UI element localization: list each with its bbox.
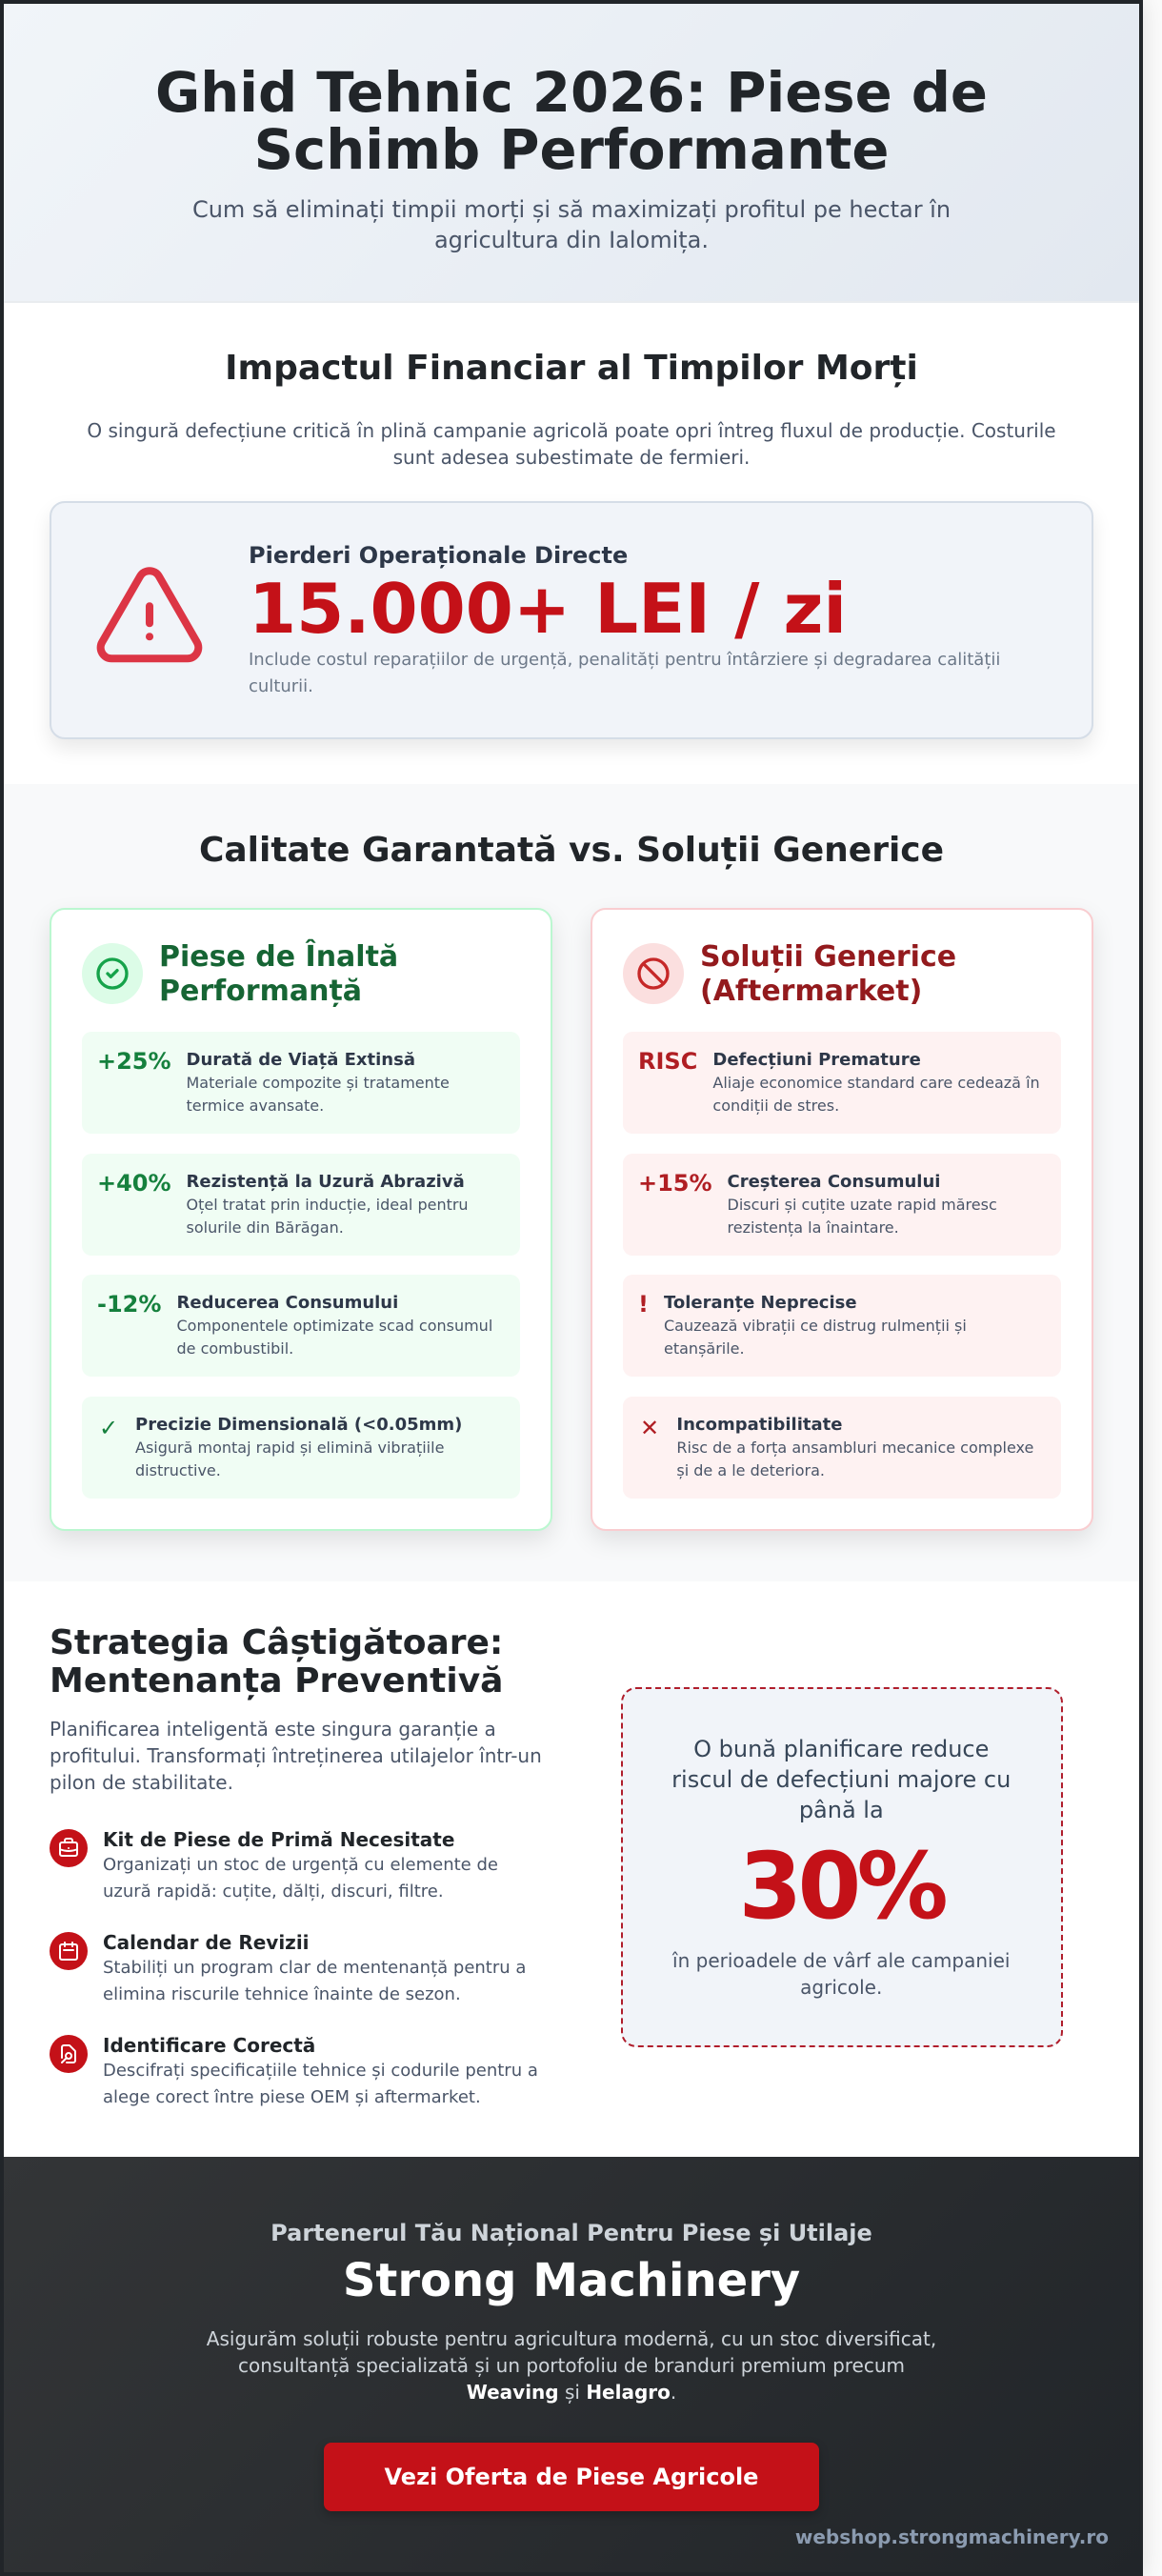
callout text top <box>671 1736 1011 1823</box>
heading: strategy: Mentenanța Preventivă <box>50 1661 503 1701</box>
step: service calendar <box>50 1930 526 2004</box>
panel: high performance parts <box>50 908 552 1531</box>
strategy text: profitului. Transformați întreținerea utilajelor într-un <box>50 1743 542 1766</box>
heading: financial impact: Impactul Financiar al Timpilor Morți <box>225 349 918 387</box>
footer text <box>207 2326 936 2404</box>
footer <box>4 2157 1139 2572</box>
callout text bottom <box>672 1949 1010 1999</box>
callout: direct losses <box>50 501 1093 739</box>
partner line: Partenerul Tău Național Pentru Piese și Utilaje <box>270 2220 872 2246</box>
intro text <box>87 419 1056 469</box>
item text <box>135 1439 444 1479</box>
panel: comparison <box>4 784 1139 1581</box>
stat: +15% <box>638 1170 712 1197</box>
note: loss details: culturii. <box>249 676 313 696</box>
step text: alege corect între piese OEM și aftermarket. <box>103 2087 481 2107</box>
item text: condiții de stres. <box>712 1097 839 1115</box>
footer text: Asigurăm soluții robuste pentru agricultura modernă, cu un stoc diversificat, <box>207 2326 936 2349</box>
step text: Stabiliți un program clar de mentenanță pentru a <box>103 1957 526 1978</box>
icon: document search <box>50 2035 88 2073</box>
subtitle: Cum să eliminați timpii morți și să maximizați profitul pe hectar în <box>192 196 951 223</box>
heading: comparison: Calitate Garantată vs. Soluții Generice <box>199 831 944 869</box>
title <box>155 61 988 182</box>
strategy text <box>50 1717 542 1793</box>
footer text: Weaving și Helagro. <box>467 2381 676 2404</box>
icon: warning triangle <box>97 567 202 663</box>
step title: Identificare Corectă <box>103 2033 315 2056</box>
callout text bottom: agricole. <box>800 1976 882 1999</box>
item: higher consumption <box>623 1154 1061 1256</box>
step text: elimina riscurile tehnice înainte de sezon. <box>103 1984 461 2004</box>
step text <box>103 2060 538 2107</box>
item text: Materiale compozite și tratamente <box>187 1074 450 1092</box>
item text <box>187 1074 450 1115</box>
cross mark: ✕ <box>640 1414 659 1440</box>
item text: Risc de a forța ansambluri mecanice complexe <box>676 1439 1033 1457</box>
note: loss details: Include costul reparațiilor de urgență, penalități pentru întârziere și degradarea calității <box>249 650 1000 670</box>
icon: calendar <box>50 1932 88 1970</box>
card title: generic: Soluții Generice <box>700 939 956 974</box>
icon: ban <box>623 943 684 1004</box>
item text <box>728 1196 997 1237</box>
callout text top: riscul de defecțiuni majore cu <box>671 1766 1011 1793</box>
item: abrasion resistance <box>82 1154 520 1256</box>
note: loss details <box>249 650 1000 696</box>
card title: high performance: Piese de Înaltă <box>159 939 398 974</box>
item text: de combustibil. <box>177 1339 293 1358</box>
item: dimensional precision <box>82 1397 520 1499</box>
item text: Componentele optimizate scad consumul <box>177 1317 492 1335</box>
item: service life <box>82 1032 520 1134</box>
item text: termice avansate. <box>187 1097 324 1115</box>
website: webshop.strongmachinery.ro <box>795 2525 1109 2547</box>
brand name: Strong Machinery <box>343 2254 800 2307</box>
strategy text: pilon de stabilitate. <box>50 1770 233 1793</box>
button: offer: Vezi Oferta de Piese Agricole <box>385 2464 758 2490</box>
stat: -12% <box>97 1290 161 1317</box>
heading: strategy <box>50 1623 503 1701</box>
button: offer <box>324 2443 819 2511</box>
step title: Kit de Piese de Primă Necesitate <box>103 1827 454 1850</box>
title: Schimb Performante <box>254 118 889 182</box>
step text: Organizați un stoc de urgență cu elemente de <box>103 1854 498 1875</box>
step: first necessity kit <box>50 1827 498 1902</box>
strategy text: Planificarea inteligentă este singura garanție a <box>50 1717 496 1740</box>
card title: generic: (Aftermarket) <box>700 974 922 1008</box>
item text: Oțel tratat prin inducție, ideal pentru <box>187 1196 469 1214</box>
callout text top: O bună planificare reduce <box>693 1736 989 1762</box>
item: tolerances <box>623 1275 1061 1377</box>
item text: distructive. <box>135 1461 221 1479</box>
label: direct losses: Pierderi Operaționale Directe <box>249 542 628 569</box>
subtitle: agricultura din Ialomița. <box>434 227 709 253</box>
panel: generic solutions <box>591 908 1093 1531</box>
item text: Cauzează vibrații ce distrug rulmenții și <box>664 1317 967 1335</box>
value: daily loss: 15.000+ LEI / zi <box>249 569 847 649</box>
panel: financial impact <box>4 303 1139 784</box>
item: incompatibility <box>623 1397 1061 1499</box>
item text: Aliaje economice standard care cedează în <box>712 1074 1040 1092</box>
heading: strategy: Strategia Câștigătoare: <box>50 1623 503 1662</box>
step: correct identification <box>50 2033 538 2107</box>
subtitle <box>192 196 951 253</box>
item text <box>664 1317 967 1358</box>
item title: Durată de Viață Extinsă <box>187 1050 415 1070</box>
step text <box>103 1854 498 1902</box>
step text: Descifrați specificațiile tehnice și codurile pentru a <box>103 2060 538 2081</box>
item text: și de a le deteriora. <box>676 1461 825 1479</box>
item title: Defecțiuni Premature <box>712 1050 921 1070</box>
stat: +25% <box>97 1048 171 1075</box>
check mark: ✓ <box>99 1414 118 1440</box>
item text <box>187 1196 469 1237</box>
callout text top: până la <box>799 1797 884 1823</box>
item title: Creșterea Consumului <box>728 1172 940 1192</box>
item text: solurile din Bărăgan. <box>187 1218 344 1237</box>
item text: Discuri și cuțite uzate rapid măresc <box>728 1196 997 1214</box>
item title: Toleranțe Neprecise <box>664 1293 857 1313</box>
intro text: sunt adesea subestimate de fermieri. <box>393 446 750 469</box>
item: premature failures <box>623 1032 1061 1134</box>
value: 30%: 30% <box>739 1833 944 1940</box>
panel: preventive maintenance <box>4 1581 1139 2157</box>
card title: high performance <box>159 939 398 1008</box>
icon: check circle <box>82 943 143 1004</box>
card title: generic <box>700 939 956 1008</box>
callout text bottom: în perioadele de vârf ale campaniei <box>672 1949 1010 1972</box>
footer text: consultanță specializată și un portofoliu de branduri premium precum <box>238 2354 905 2377</box>
step text <box>103 1957 526 2004</box>
item title: Precizie Dimensională (<0.05mm) <box>135 1415 462 1435</box>
step text: uzură rapidă: cuțite, dălți, discuri, filtre. <box>103 1882 444 1902</box>
step title: Calendar de Revizii <box>103 1930 310 1953</box>
icon: briefcase <box>50 1829 88 1867</box>
item text <box>712 1074 1040 1115</box>
item title: Reducerea Consumului <box>177 1293 398 1313</box>
item text <box>177 1317 492 1358</box>
callout: thirty percent <box>621 1687 1063 2047</box>
item text: etanșările. <box>664 1339 745 1358</box>
exclamation mark: ! <box>638 1290 649 1317</box>
stat: +40% <box>97 1170 171 1197</box>
item text <box>676 1439 1033 1479</box>
intro text: O singură defecțiune critică în plină campanie agricolă poate opri întreg fluxul de producție. Costurile <box>87 419 1056 442</box>
item title: Incompatibilitate <box>676 1415 842 1435</box>
item text: Asigură montaj rapid și elimină vibrațiile <box>135 1439 444 1457</box>
card title: high performance: Performanță <box>159 974 362 1008</box>
item text: rezistența la înaintare. <box>728 1218 899 1237</box>
header <box>4 4 1139 303</box>
stat: RISC <box>638 1048 697 1075</box>
item title: Rezistență la Uzură Abrazivă <box>187 1172 465 1192</box>
item: lower consumption <box>82 1275 520 1377</box>
title: Ghid Tehnic 2026: Piese de <box>155 61 988 125</box>
